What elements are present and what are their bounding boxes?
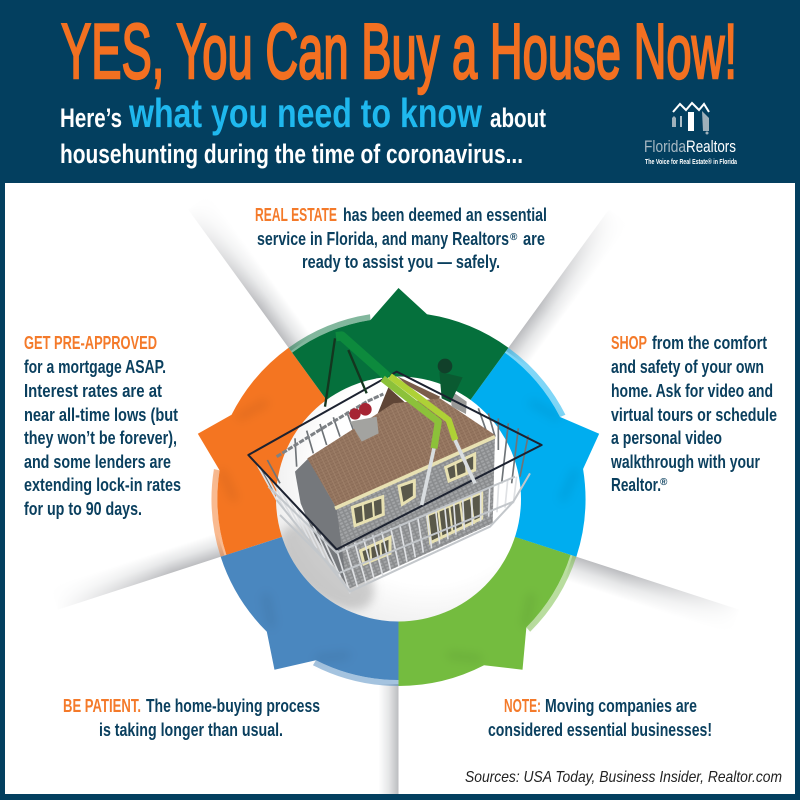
logo: Florida Realtors [644,103,737,166]
text block: real estate: ® [510,232,518,243]
text block: get pre-approved: they won’t be forever), [24,428,177,448]
text block: be patient: BE PATIENT. [63,696,141,716]
logo: Florida Realtors: The Voice for Real Estate® in Florida [645,158,737,166]
logo: Florida Realtors: Realtors [686,137,736,156]
text block: real estate: service in Florida, and many Realtors [257,229,509,249]
text block: get pre-approved: and some lenders are [24,452,171,472]
inner white circle [276,376,521,622]
text block: real estate: ready to assist you — safely. [302,252,500,272]
text block: shop: Realtor. [611,475,661,495]
window muntins [363,459,474,561]
left chimney [350,417,379,442]
text block: get pre-approved: for a mortgage ASAP. [24,357,166,377]
back roof dormer [375,387,413,427]
text block: be patient: The home-buying process [146,696,320,716]
text block: shop: walkthrough with your [610,452,760,472]
frame border [0,183,800,800]
text block: shop: from the comfort [652,333,767,353]
text block: real estate [255,205,547,272]
basket back rail and chain [277,394,383,457]
text block: shop: SHOP [611,333,647,353]
logo: Florida Realtors: Florida [644,137,686,156]
windows [352,454,482,564]
right chimney [450,390,467,414]
text block: note: NOTE: [504,696,541,716]
subtitle: about [490,103,546,133]
green handle [336,336,388,377]
house in shopping basket [248,336,542,626]
subtitle [60,90,546,169]
text block: note [488,696,712,740]
segment: orange [164,329,432,604]
text block: be patient [63,696,320,740]
segment: bright blue [365,329,633,604]
text block: get pre-approved [24,333,181,519]
text block: get pre-approved: for up to 90 days. [24,499,142,519]
text block: get pre-approved: GET PRE-APPROVED [24,333,157,353]
subtitle: househunting during the time of coronavirus... [60,139,523,169]
text block: get pre-approved: extending lock-in rates [24,475,181,495]
basket shadow [280,520,378,613]
segment: light green [310,434,611,734]
central pentagon star wheel [164,288,633,734]
text block: shop: a personal video [611,428,722,448]
handle rods [422,440,475,505]
roof [307,398,495,508]
segment: dark green [289,288,508,499]
text block: get pre-approved: near all-time lows (but [24,405,178,425]
text block: shop [610,333,777,495]
text block: real estate: REAL ESTATE [255,205,337,225]
subtitle: what you need to know [128,90,482,136]
handle chains [325,338,367,407]
text block: note: Moving companies are [545,696,697,716]
text block: note: considered essential businesses! [488,720,712,740]
segment: steel blue [186,434,487,734]
basket front wires [257,465,517,593]
house walls [337,437,495,588]
text block: get pre-approved: Interest rates are at [24,381,162,401]
text block: be patient: is taking longer than usual. [99,720,283,740]
fascia [335,437,495,508]
text block: shop: ® [660,477,668,488]
header band [0,0,800,183]
basket rails [268,473,530,592]
subtitle: Here’s [60,103,122,133]
radiating grey dividers [48,191,741,799]
basket back wires [260,408,528,493]
basket rim [248,372,542,549]
logo icon [672,103,709,134]
text block: real estate: are [523,229,545,249]
text block: real estate: has been deemed an essential [343,205,547,225]
